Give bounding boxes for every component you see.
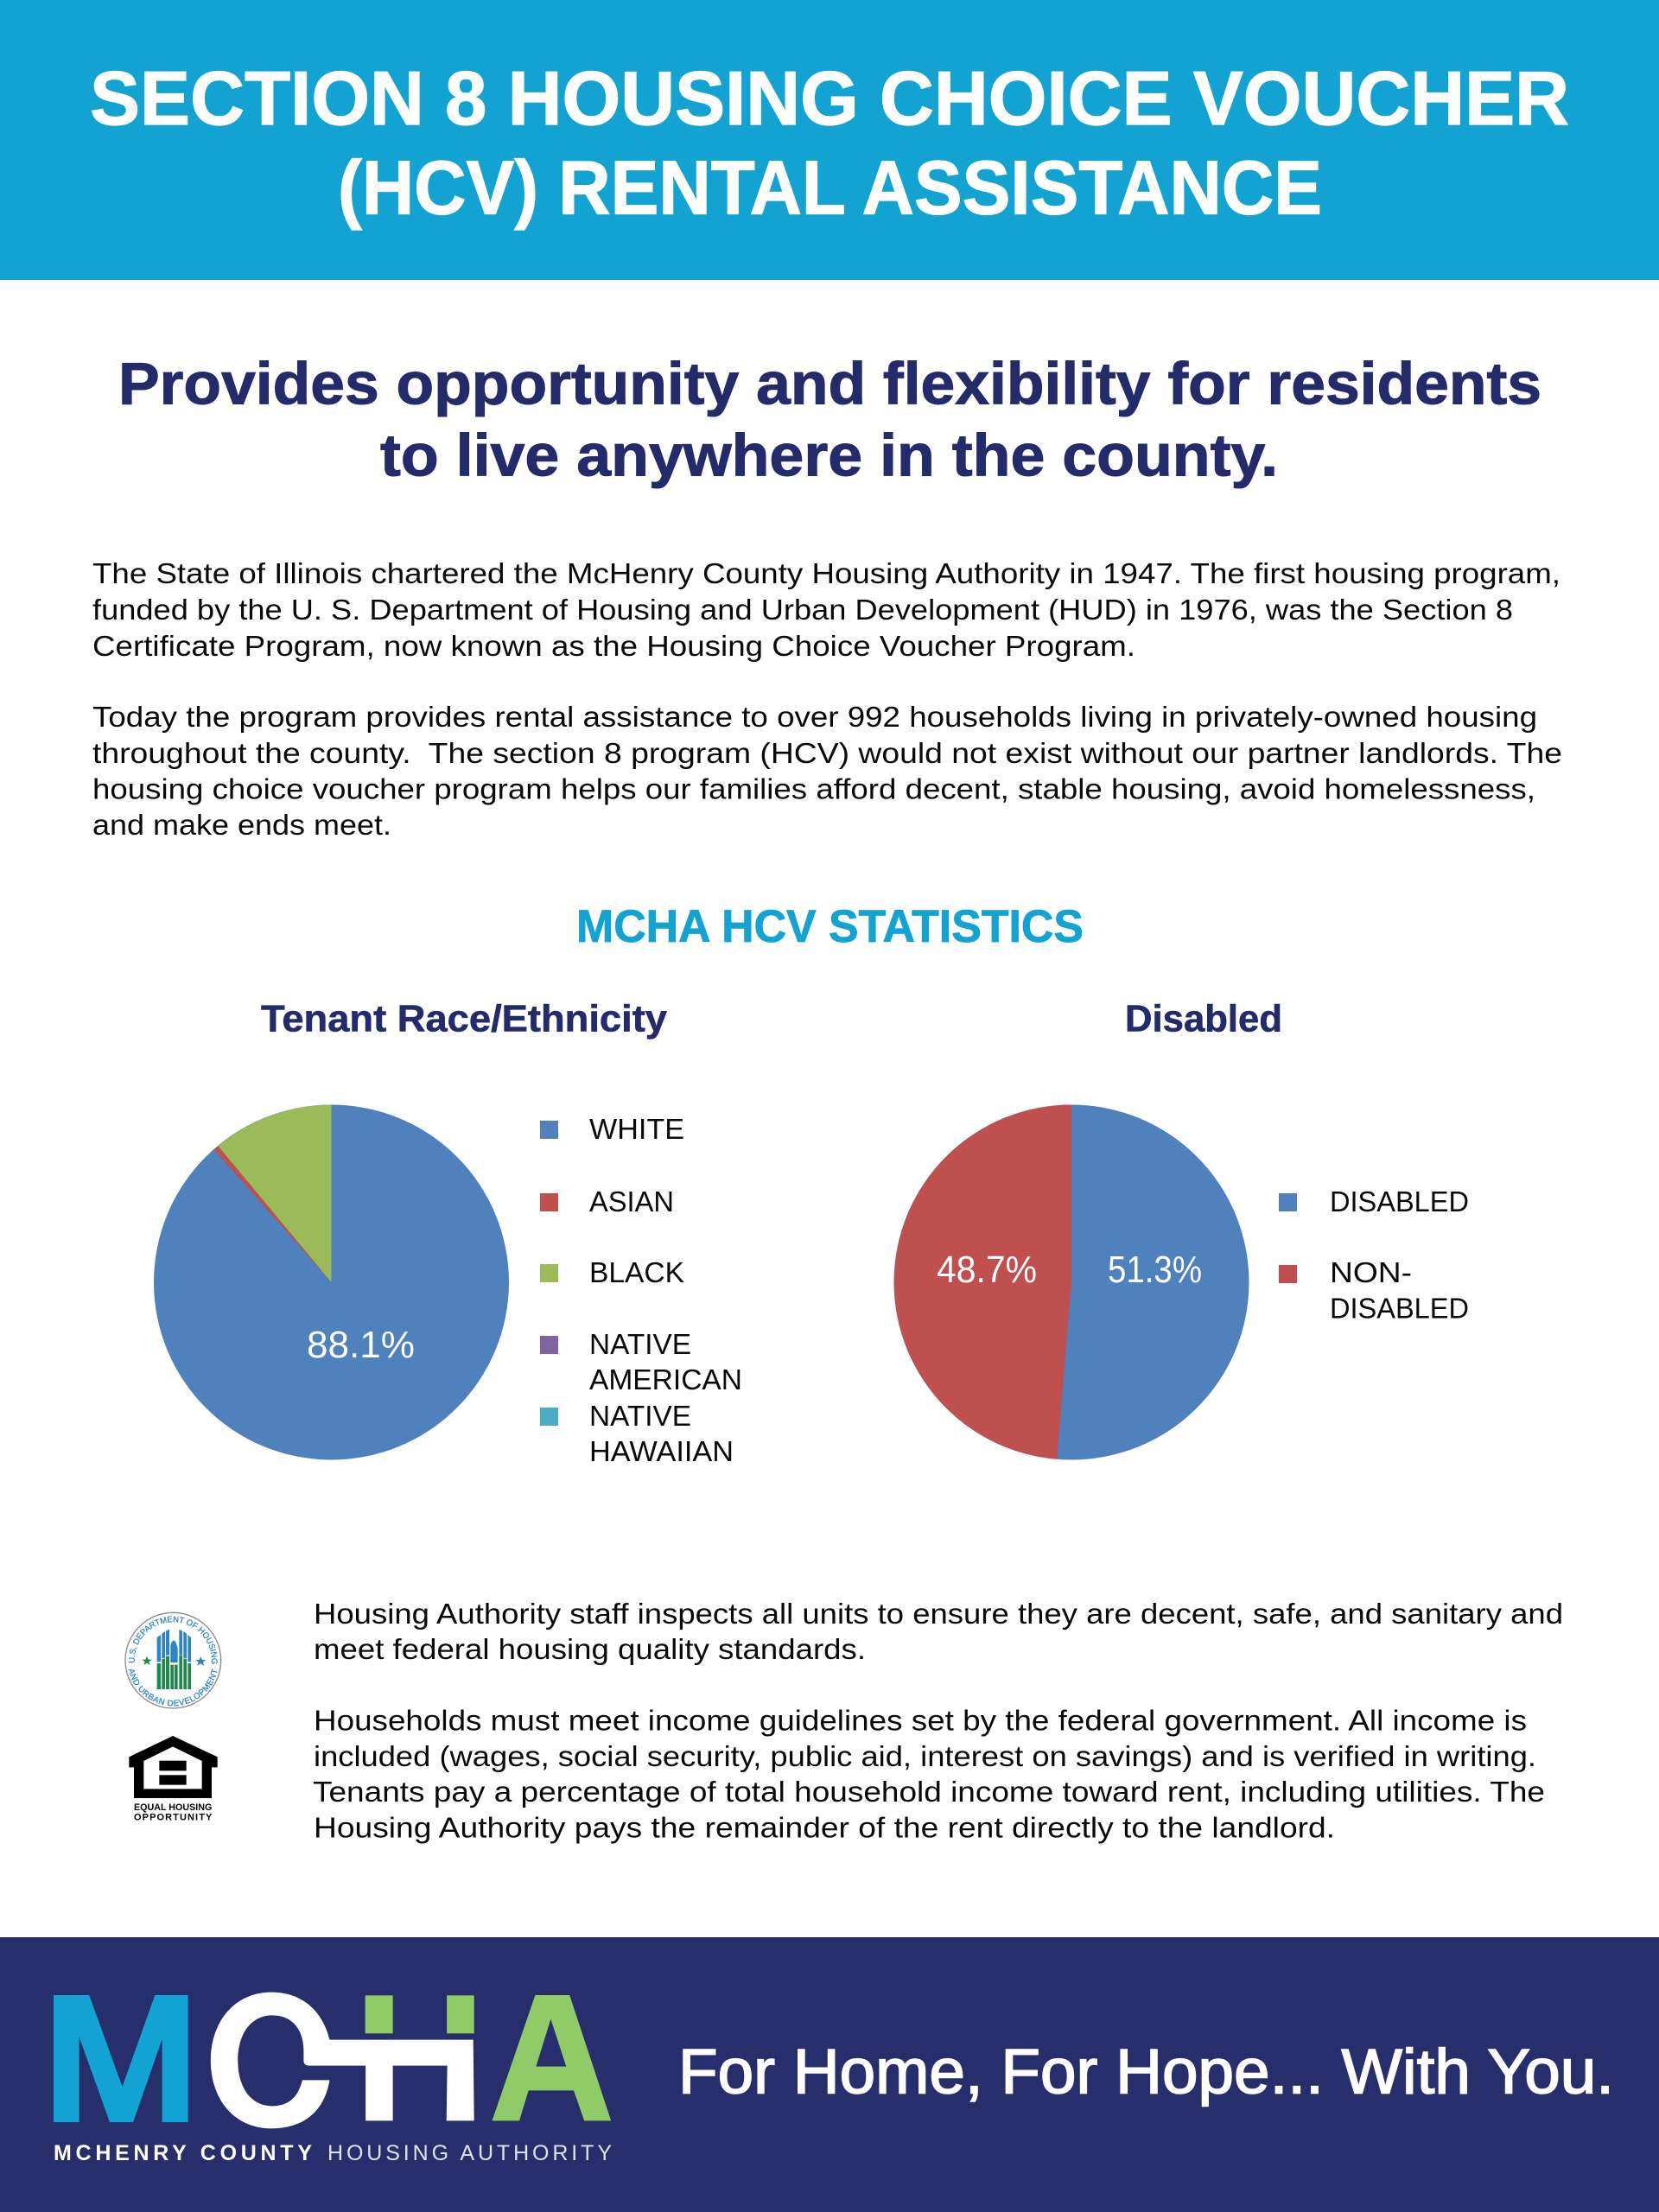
pie chart: tenant race: 88.1% [307,1324,415,1366]
icon: HUD seal [124,1612,221,1709]
legend: disabled: DISABLED [1330,1185,1469,1217]
logo wordmark [54,2141,612,2165]
requirements text block: Housing Authority staff inspects all units to ensure they are decent, safe, and sanitary and [314,1598,1563,1630]
requirements text block [313,1598,1563,1844]
intro text block: throughout the county. The section 8 program (HCV) would not exist without our partner landlords. The [92,737,1562,769]
logo wordmark: HOUSING AUTHORITY [327,2141,612,2165]
intro text block: housing choice voucher program helps our families afford decent, stable housing, avoid homelessness, [92,772,1535,805]
legend: tenant race: NATIVE [589,1400,691,1432]
header banner [0,0,1659,280]
footer band [0,1937,1659,2212]
chart title: tenant race: Tenant Race/Ethnicity [261,997,668,1040]
intro text block: Today the program provides rental assistance to over 992 households living in privately-owned housing [92,701,1537,733]
legend: disabled: DISABLED [1330,1293,1469,1324]
requirements text block: Households must meet income guidelines set by the federal government. All income is [314,1704,1527,1737]
subheading: to live anywhere in the county. [380,422,1278,489]
requirements text block: meet federal housing quality standards. [314,1633,866,1665]
requirements text block: Housing Authority pays the remainder of the rent directly to the landlord. [314,1811,1335,1844]
legend: tenant race: HAWAIIAN [589,1435,734,1467]
legend: tenant race: WHITE [589,1113,684,1145]
legend: tenant race: BLACK [589,1256,684,1288]
statistics heading: MCHA HCV STATISTICS [576,901,1084,952]
tagline: For Home, For Hope... With You. [678,2037,1614,2107]
title: (HCV) RENTAL ASSISTANCE [338,145,1322,230]
legend: tenant race: ASIAN [589,1185,674,1217]
icon: equal housing opportunity: EQUAL HOUSING [134,1802,212,1813]
intro text block: funded by the U. S. Department of Housing and Urban Development (HUD) in 1976, was the Section 8 [92,594,1513,626]
title [90,55,1569,230]
legend: tenant race: NATIVE [589,1328,691,1360]
intro text block: Certificate Program, now known as the Housing Choice Voucher Program. [92,630,1135,662]
intro text block: The State of Illinois chartered the McHenry County Housing Authority in 1947. The first housing program, [92,557,1560,589]
pie chart: disabled: 48.7% [937,1249,1037,1291]
subheading [118,351,1541,489]
legend: tenant race [540,1113,742,1467]
legend: disabled: NON- [1330,1256,1412,1288]
intro text block: and make ends meet. [92,809,391,841]
requirements text block: Tenants pay a percentage of total household income toward rent, including utilities. The [313,1776,1545,1808]
pie chart: disabled [893,1104,1249,1460]
intro text block [92,557,1562,841]
icon: HUD seal: AND URBAN DEVELOPMENT [128,1668,218,1706]
icon: HUD seal: U.S. DEPARTMENT OF HOUSING [128,1616,218,1664]
chart title: disabled: Disabled [1125,997,1282,1040]
subheading: Provides opportunity and flexibility for residents [118,351,1541,416]
logo: MCHA [54,1993,611,2128]
legend: disabled [1279,1185,1469,1324]
pie chart: tenant race [154,1104,509,1460]
title: SECTION 8 HOUSING CHOICE VOUCHER [90,55,1569,141]
pie chart: disabled: 51.3% [1108,1249,1202,1291]
legend: tenant race: AMERICAN [589,1363,742,1395]
requirements text block: included (wages, social security, public aid, interest on savings) and is verified in writing. [314,1740,1536,1772]
icon: equal housing opportunity: OPPORTUNITY [134,1813,213,1823]
icon: equal housing opportunity [129,1736,218,1823]
logo wordmark: MCHENRY COUNTY [54,2141,312,2165]
